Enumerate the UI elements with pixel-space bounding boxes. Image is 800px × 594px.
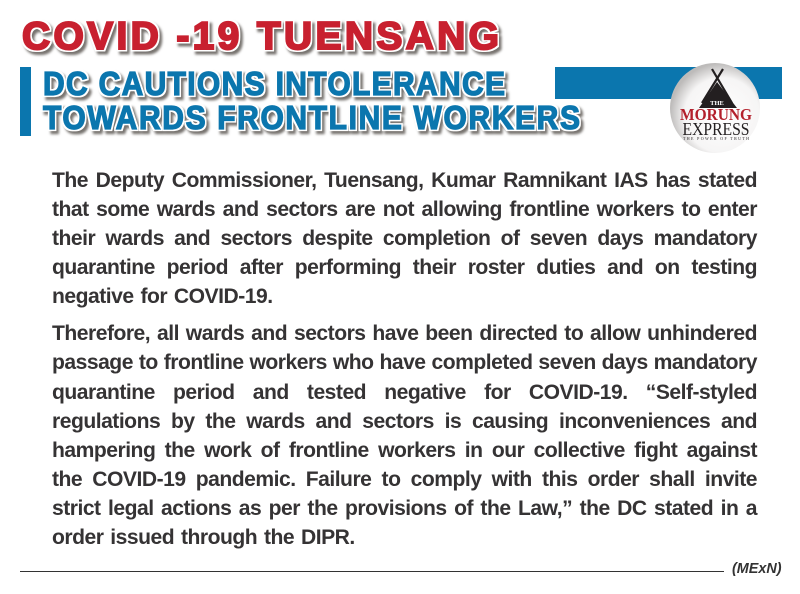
logo wordmark: EXPRESS <box>682 119 750 139</box>
subtitle line 2: TOWARDS FRONTLINE WORKERS <box>43 98 580 136</box>
paragraph 2: Therefore, all wards and sectors have been directed to allow unhindered <box>52 322 757 345</box>
paragraph 1: negative for COVID-19. <box>52 285 273 308</box>
paragraph 1: that some wards and sectors are not allowing frontline workers to enter <box>52 198 757 221</box>
paragraph 2: hampering the work of frontline workers in our collective fight against <box>52 439 757 462</box>
paragraph 2: strict legal actions as per the provisions of the Law,” the DC stated in a <box>52 497 757 520</box>
paragraph 2: regulations by the wards and sectors is causing inconveniences and <box>52 410 757 433</box>
paragraph 1 <box>52 169 758 308</box>
logo wordmark: MORUNG <box>680 105 752 124</box>
headlines <box>22 15 586 136</box>
source credit: (MExN) <box>732 561 782 577</box>
paragraph 2: the COVID-19 pandemic. Failure to comply with this order shall invite <box>52 468 757 491</box>
footer rule <box>20 571 724 572</box>
logo: The Morung Express <box>670 63 760 153</box>
paragraph 1: quarantine period after performing their roster duties and on testing <box>52 256 757 279</box>
logo disc <box>670 63 760 153</box>
paragraph 1: The Deputy Commissioner, Tuensang, Kumar Ramnikant IAS has stated <box>52 169 757 192</box>
logo wordmark: THE POWER OF TRUTH <box>683 136 749 141</box>
logo wordmark <box>680 100 752 141</box>
hut icon <box>699 69 737 108</box>
paragraph 2: passage to frontline workers who have completed seven days mandatory <box>52 351 757 374</box>
logo wordmark: THE <box>710 100 724 107</box>
title: COVID -19 TUENSANG <box>22 15 499 58</box>
left blue accent bar <box>20 67 31 136</box>
subtitle line 1: DC CAUTIONS INTOLERANCE <box>43 64 505 102</box>
paragraph 2: quarantine period and tested negative for COVID-19. “Self-styled <box>52 381 757 404</box>
right blue banner bar <box>555 67 782 99</box>
paragraph 1: their wards and sectors despite completion of seven days mandatory <box>52 227 757 250</box>
paragraph 2: order issued through the DIPR. <box>52 526 355 549</box>
